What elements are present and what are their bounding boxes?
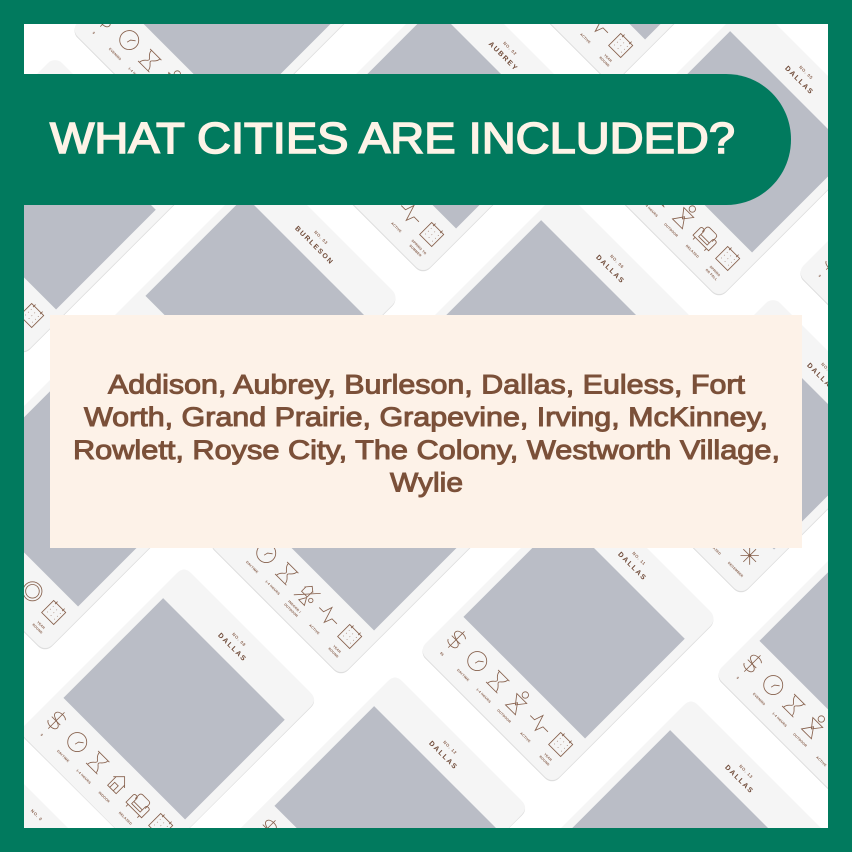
card icons: [36, 708, 175, 847]
card label: DALLAS: [216, 632, 247, 663]
card icons: ACTIVE: [308, 623, 321, 636]
card: centre behind panel: [207, 377, 507, 677]
card: right edge upper: [796, 107, 852, 407]
card icons: DECEMBER: [727, 561, 744, 579]
card label: NO. 0: [30, 808, 44, 822]
panel: city list: [50, 315, 802, 548]
card label: NO. 13: [738, 764, 754, 779]
card icons: [573, 8, 634, 69]
card label: [216, 625, 254, 663]
card icons: ACTIVE: [519, 731, 532, 744]
card label: AUBREY: [487, 41, 518, 72]
city list text: [73, 370, 780, 498]
card icons: [434, 626, 576, 768]
card label: DALLAS: [723, 764, 754, 795]
city list text: Rowlett, Royse City, The Colony, Westworth Village,: [73, 435, 780, 465]
card icons: 1-4 HOURS: [642, 201, 659, 218]
card label: [616, 544, 654, 582]
card icons: $: [40, 733, 44, 737]
card label: NO. 05: [798, 65, 814, 80]
city list text: Wylie: [390, 468, 463, 498]
card icons: [732, 650, 850, 768]
card label: NO. 02: [502, 41, 518, 56]
card label: [594, 247, 632, 285]
card icons: OR FALL: [705, 268, 718, 282]
card: left edge: [0, 56, 189, 356]
card icons: ROUND: [538, 755, 551, 767]
card icons: SPRING TO: [410, 239, 428, 256]
card icons: RELAXED: [707, 541, 722, 556]
card icons: ROUND: [327, 647, 340, 659]
card icons: [8, 577, 67, 636]
card icons: OUTDOOR: [283, 602, 299, 619]
card: far top right: [784, 0, 852, 114]
card label: DALLAS: [783, 65, 814, 96]
card icons: DAYTIME: [245, 560, 260, 575]
card icons: ACTIVE: [390, 221, 403, 234]
card icons: [640, 179, 743, 282]
card icons: EVENING: [752, 692, 766, 707]
card: Aubrey: [289, 0, 589, 275]
card label: NO. 08: [231, 632, 247, 647]
card icons: EVENING: [108, 47, 122, 62]
card: Dallas no. 13: [549, 702, 833, 840]
card icons: 1-4 HOURS: [75, 768, 92, 785]
card icons: DAYTIME: [456, 668, 471, 683]
card label: NO. 11: [631, 551, 647, 566]
card label: NO. 12: [442, 740, 458, 755]
card label: [783, 58, 821, 96]
card icons: SUMMER: [408, 244, 423, 258]
card: top-left strip: [70, 0, 370, 164]
city list text: Worth, Grand Prairie, Grapevine, Irving, McKinney,: [84, 402, 768, 432]
card icons: [88, 5, 209, 126]
card icons: 1-4 HOURS: [264, 579, 281, 596]
card: Dallas no. 12: [229, 678, 525, 841]
card icons: ACTIVE: [579, 32, 592, 45]
card icons: YEAR: [36, 620, 46, 630]
card icons: YEAR: [603, 53, 613, 63]
card icons: YEAR: [14, 323, 24, 333]
card: Burleson: [100, 164, 400, 464]
card icons: [255, 816, 280, 841]
card label: [427, 733, 465, 771]
card label: DALLAS: [616, 551, 647, 582]
title banner: [24, 74, 791, 205]
card icons: YEAR: [543, 752, 553, 762]
city list text: Addison, Aubrey, Burleson, Dallas, Euless, Fort: [108, 370, 746, 400]
card label: [805, 355, 843, 393]
card icons: OUTDOOR: [148, 87, 164, 103]
card label: [723, 757, 761, 795]
card icons: 1-4 HOURS: [475, 687, 492, 704]
card icons: OUTDOOR: [792, 732, 808, 748]
card icons: [0, 278, 45, 339]
card icons: INDOOR: [98, 791, 111, 804]
card label: NO. 10: [820, 362, 836, 377]
card label: DALLAS: [427, 740, 458, 771]
card label: [487, 34, 525, 72]
card icons: $$: [439, 651, 445, 657]
card: Dallas right edge: [607, 296, 852, 596]
card icons: $: [818, 274, 822, 278]
card icons: ROUND: [9, 326, 22, 338]
card icons: 1-4 HOURS: [771, 711, 788, 728]
card icons: 1-4 HOURS: [127, 66, 144, 83]
card icons: SPRING: [709, 265, 721, 278]
card icons: $: [736, 676, 740, 680]
card: bottom-left corner: [0, 759, 80, 840]
card icons: RELAXED: [118, 811, 133, 826]
card label: NO. 03: [313, 230, 329, 245]
card icons: OUTDOOR: [496, 708, 512, 724]
card icons: DAYTIME: [56, 749, 71, 764]
card label: DALLAS: [594, 254, 625, 285]
card label: BURLESON: [293, 225, 334, 265]
card icons: ROUND: [31, 623, 44, 635]
card icons: [242, 539, 363, 660]
card: top right: [478, 0, 778, 86]
card icons: RELAXED: [685, 244, 700, 259]
title: WHAT CITIES ARE INCLUDED?: [50, 114, 735, 163]
card icons: INDOOR /: [287, 600, 302, 614]
card icons: ROUND: [598, 56, 611, 68]
card icons: OUTDOOR: [663, 222, 679, 238]
card icons: [384, 197, 446, 259]
card: Dallas no. 08: [22, 570, 314, 847]
card: lower-left edge: [0, 353, 211, 653]
card icons: ACTIVE: [815, 755, 828, 768]
card icons: [814, 249, 847, 282]
card: Dallas no. 05: [585, 0, 852, 299]
card icons: YEAR: [332, 644, 342, 654]
card icons: [707, 522, 764, 579]
card label: DALLAS: [805, 362, 836, 393]
card icons: $: [92, 31, 96, 35]
card: Dallas no. 11: [418, 485, 718, 785]
card label: NO. 06: [609, 254, 625, 269]
card: Dallas no. 06: [396, 188, 696, 488]
card: right edge lower: [714, 509, 852, 809]
